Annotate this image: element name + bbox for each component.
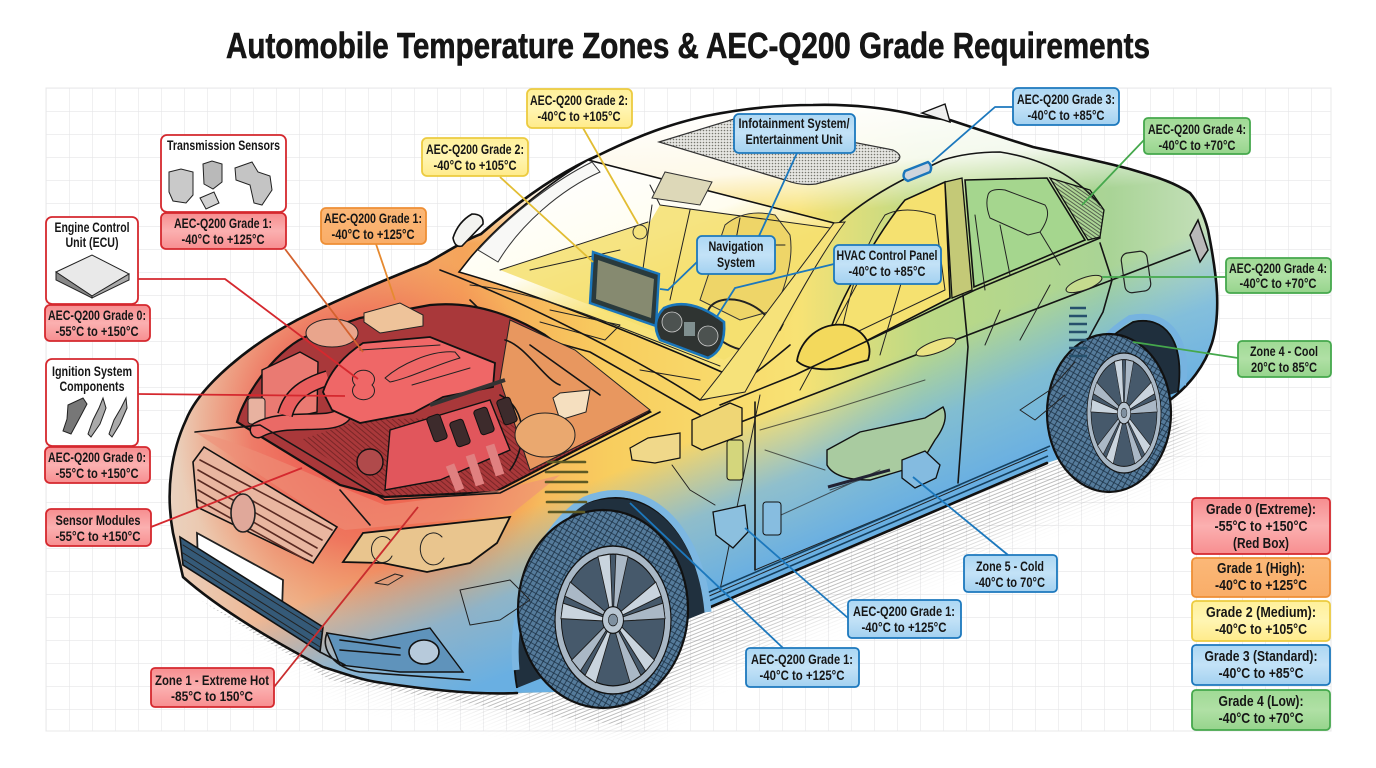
bay front edge <box>195 412 660 525</box>
label: zone 4 <box>1238 341 1331 377</box>
label: navigation <box>697 236 775 274</box>
label: yellow grade 2 top: AEC-Q200 Grade 2: <box>530 92 628 108</box>
headlight <box>343 517 510 572</box>
legend: grade 2: -40°C to +105°C <box>1215 621 1307 638</box>
headlight lenses <box>371 533 444 565</box>
legend: grade 4: Grade 4 (Low): <box>1218 693 1304 710</box>
sunroof <box>659 119 900 184</box>
label: ignition grade <box>45 447 150 483</box>
interior view <box>500 205 830 360</box>
module upper <box>692 403 742 450</box>
label: infotainment <box>734 114 855 153</box>
dashboard lines <box>470 285 720 380</box>
bracket module <box>630 433 680 463</box>
legend: grade 0: Grade 0 (Extreme): <box>1206 501 1316 518</box>
label: sensor modules: -55°C to +150°C <box>56 528 140 544</box>
engine cover <box>323 337 495 423</box>
steering wheel <box>699 289 781 361</box>
legend: grade 1: Grade 1 (High): <box>1217 560 1305 577</box>
label: zone 1: Zone 1 - Extreme Hot <box>155 672 269 688</box>
legend: grade 2 <box>1192 601 1330 641</box>
label: transmission grade: AEC-Q200 Grade 1: <box>174 215 272 231</box>
wipers <box>470 300 700 415</box>
rear view mirror <box>652 172 712 205</box>
B pillar <box>945 178 972 298</box>
fog lamp housing <box>327 628 463 672</box>
shark fin antenna <box>922 104 950 122</box>
label: grade 1 upper: -40°C to +125°C <box>862 619 946 635</box>
panel: ignition <box>46 359 138 446</box>
label: grade 1 upper: AEC-Q200 Grade 1: <box>853 603 955 619</box>
interior seats <box>700 213 791 320</box>
rear seat <box>987 190 1048 235</box>
ground shadow hatching <box>202 398 1200 736</box>
seat rail <box>828 470 890 487</box>
label: grade 1 lower: AEC-Q200 Grade 1: <box>751 651 853 667</box>
tail light <box>1190 220 1208 262</box>
label: grade 3: AEC-Q200 Grade 3: <box>1017 91 1115 107</box>
label: grade 1 lower: -40°C to +125°C <box>760 667 844 683</box>
label: HVAC: HVAC Control Panel <box>836 247 938 263</box>
leader: HVAC <box>716 264 834 318</box>
legend: grade 1 <box>1192 558 1330 597</box>
wiring <box>672 465 715 505</box>
icon: spark plugs <box>63 398 127 437</box>
label: yellow grade 2 left <box>422 138 528 176</box>
label: grade 4 top: AEC-Q200 Grade 4: <box>1148 121 1246 137</box>
actuator module <box>713 505 748 548</box>
sensor modules <box>630 403 940 548</box>
mirror left <box>453 214 483 246</box>
A-pillar right <box>700 222 845 400</box>
label: zone 5: Zone 5 - Cold <box>976 558 1044 574</box>
cowl edge <box>440 270 790 400</box>
label: zone 5: -40°C to 70°C <box>975 574 1045 590</box>
label: zone 1: -85°C to 150°C <box>171 688 253 704</box>
background grid <box>46 88 1331 731</box>
legend: grade 4: -40°C to +70°C <box>1218 710 1304 727</box>
legend: grade 4 <box>1192 690 1330 730</box>
label: zone 4: Zone 4 - Cool <box>1250 343 1318 359</box>
component box <box>364 303 423 333</box>
windshield <box>459 160 834 373</box>
body outline <box>170 105 1217 693</box>
seat floor <box>760 380 925 520</box>
intake hoses <box>258 415 343 430</box>
belt pulleys <box>357 449 383 475</box>
legend: grade 2: Grade 2 (Medium): <box>1206 604 1316 621</box>
engine cover ribs <box>353 345 470 400</box>
leader: grade 2 left <box>500 177 593 262</box>
label: navigation: Navigation <box>708 238 764 254</box>
relay <box>727 440 743 480</box>
grille panel <box>195 432 560 530</box>
car body with temperature gradient <box>150 90 1230 710</box>
coolant reservoir <box>553 390 590 420</box>
panel: transmission sensors: Transmission Sensors <box>167 137 280 153</box>
strut tower <box>515 413 575 457</box>
leader: ignition <box>138 394 345 396</box>
zone 5 module <box>902 451 940 488</box>
label: orange grade 1: -40°C to +125°C <box>332 226 414 242</box>
grille badge <box>231 494 255 532</box>
legend: grade 3: -40°C to +85°C <box>1218 665 1304 682</box>
legend: grade 0 <box>1192 498 1330 554</box>
battery box <box>262 352 318 424</box>
label: transmission grade <box>161 213 286 249</box>
leader: ECU <box>138 279 358 379</box>
bay opening <box>237 304 650 497</box>
suspension arms <box>1020 362 1075 420</box>
legend: grade 3 <box>1192 645 1330 685</box>
leader: grade 1 upper <box>745 528 848 618</box>
label: orange grade 1: AEC-Q200 Grade 1: <box>324 210 422 226</box>
car illustration <box>150 90 1230 740</box>
sill band <box>697 446 1050 606</box>
label: zone 1 <box>151 668 274 707</box>
leader: orange grade 1 <box>376 244 395 300</box>
label: infotainment: Entertainment Unit <box>746 131 843 147</box>
rear strut spring <box>1069 308 1087 356</box>
leader: grade 1 lower <box>630 503 783 648</box>
panel: transmission sensors <box>161 135 286 212</box>
leader: sensor modules <box>151 468 302 527</box>
leader: transmission <box>285 249 363 352</box>
seat cushion <box>827 407 945 480</box>
fuel door <box>1120 250 1152 294</box>
label: sensor modules <box>46 509 151 546</box>
label: infotainment: Infotainment System/ <box>738 115 850 131</box>
icon: ECU <box>56 255 129 298</box>
label: zone 4: 20°C to 85°C <box>1251 359 1317 375</box>
front strut spring <box>546 462 587 512</box>
fuel rail <box>430 380 505 405</box>
label: yellow grade 2 top: -40°C to +105°C <box>538 108 620 124</box>
label: grade 4 top <box>1144 118 1250 154</box>
leader: grade 4 top <box>1082 140 1144 205</box>
panel: ignition: Components <box>60 378 125 394</box>
legend: grade 0: (Red Box) <box>1233 535 1289 552</box>
label: ECU grade <box>45 305 150 341</box>
leader: grade 3 <box>932 107 1013 162</box>
navigation screen <box>590 252 659 326</box>
front seat <box>800 210 945 390</box>
label: grade 1 lower <box>746 648 859 687</box>
instrument cluster <box>656 304 724 358</box>
label: ignition grade: AEC-Q200 Grade 0: <box>48 449 146 465</box>
tow hook cover <box>375 574 403 585</box>
label: sensor modules: Sensor Modules <box>56 512 141 528</box>
bay right side <box>500 320 650 470</box>
legend: grade 3: Grade 3 (Standard): <box>1204 648 1318 665</box>
leader: infotainment <box>759 153 797 236</box>
label: HVAC <box>834 245 941 284</box>
leader: zone 5 <box>913 477 1008 555</box>
rear side window <box>965 178 1085 287</box>
rear quarter window <box>1050 178 1104 240</box>
label: grade 4 right: -40°C to +70°C <box>1240 275 1316 291</box>
small module <box>763 502 781 535</box>
label: grade 4 top: -40°C to +70°C <box>1158 137 1236 153</box>
legend: grade 1: -40°C to +125°C <box>1215 577 1307 594</box>
icon: sensors <box>169 161 272 209</box>
grille <box>193 447 337 563</box>
label: navigation: System <box>717 254 755 270</box>
roof module <box>904 162 931 181</box>
ignition coils <box>426 396 518 448</box>
label: ignition grade: -55°C to +150°C <box>56 465 138 481</box>
fog lamp <box>409 640 439 664</box>
label: HVAC: -40°C to +85°C <box>848 263 926 279</box>
leader: navigation <box>660 262 697 290</box>
bumper contour <box>320 633 470 680</box>
panel: ECU: Engine Control <box>54 219 130 235</box>
reservoir left <box>306 319 358 347</box>
leader: zone 1 <box>274 507 418 687</box>
label: transmission grade: -40°C to +125°C <box>182 231 264 247</box>
right side mirror <box>797 325 869 369</box>
label: yellow grade 2 top <box>527 89 632 128</box>
rear fender arch <box>1057 321 1179 433</box>
panel: ignition: Ignition System <box>52 363 132 379</box>
lower bumper intake <box>180 537 323 652</box>
front sub-frame <box>460 580 530 625</box>
label: orange grade 1 <box>321 208 426 244</box>
bay hatching <box>300 412 650 497</box>
label: yellow grade 2 left: -40°C to +105°C <box>434 157 516 173</box>
legend: grade 0: -55°C to +150°C <box>1214 518 1308 535</box>
title: Automobile Temperature Zones & AEC-Q200 Grade Requirements <box>226 25 1150 66</box>
label: yellow grade 2 left: AEC-Q200 Grade 2: <box>426 141 524 157</box>
label: grade 4 right: AEC-Q200 Grade 4: <box>1229 260 1327 276</box>
label: grade 3: -40°C to +85°C <box>1028 107 1104 123</box>
leader: zone 4 <box>1133 342 1238 358</box>
label: ECU grade: -55°C to +150°C <box>56 323 138 339</box>
front wheel <box>518 510 688 708</box>
label: grade 1 upper <box>848 600 961 638</box>
engine block <box>385 400 510 490</box>
label: zone 5 <box>964 555 1057 592</box>
A-pillar left <box>478 162 600 262</box>
label: grade 4 right <box>1226 258 1331 293</box>
engine bay <box>237 303 650 497</box>
fluid cap <box>248 398 265 424</box>
front fender arch <box>514 498 706 688</box>
license plate <box>197 533 283 610</box>
door handles <box>1064 272 1104 296</box>
leader: grade 2 top <box>583 128 638 224</box>
leader lines <box>138 107 1238 687</box>
rear wheel <box>1047 334 1171 492</box>
beltline and door lines <box>720 238 1190 570</box>
legend <box>1192 498 1330 730</box>
hoses right <box>500 340 600 470</box>
label: grade 3 <box>1013 88 1119 125</box>
panel: ECU: Unit (ECU) <box>66 234 118 250</box>
label: ECU grade: AEC-Q200 Grade 0: <box>48 307 146 323</box>
leader: grade 4 right <box>1102 276 1226 278</box>
roof rail <box>840 152 1100 222</box>
panel: ECU <box>46 217 138 304</box>
front side window <box>825 182 950 362</box>
exhaust manifold <box>450 445 500 490</box>
